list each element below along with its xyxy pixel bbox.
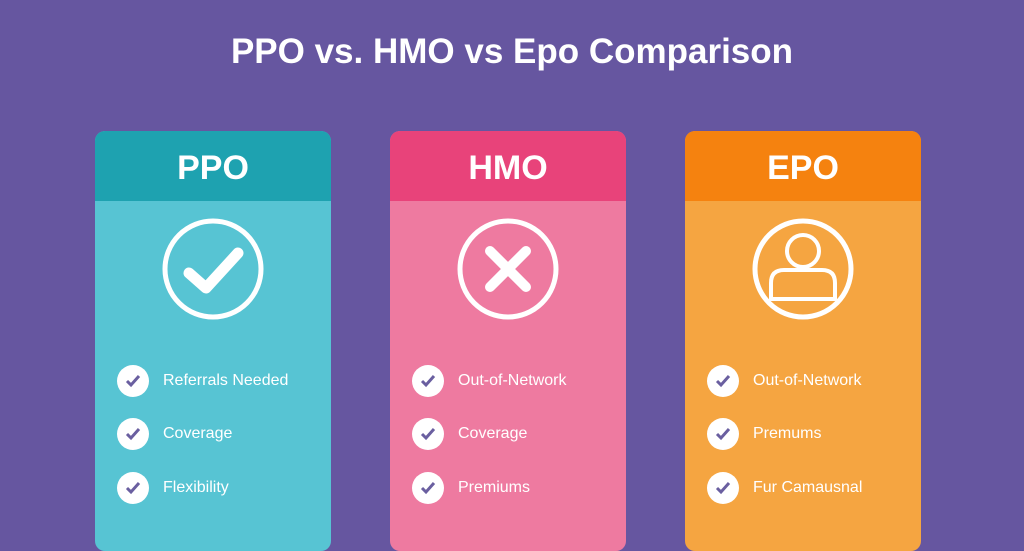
heading: PPO: PPO (177, 149, 249, 187)
icon: check circle (162, 218, 264, 320)
item (117, 365, 288, 397)
item: Premiums (458, 479, 530, 496)
item (412, 365, 566, 397)
item: Out-of-Network (753, 372, 861, 389)
icon: x circle (458, 218, 558, 320)
item: Fur Camausnal (753, 479, 862, 496)
item: Out-of-Network (458, 372, 566, 389)
item (117, 418, 232, 450)
item (117, 472, 229, 504)
item (707, 365, 862, 397)
item: Coverage (458, 425, 527, 442)
item (412, 472, 530, 504)
heading: PPO (95, 131, 331, 201)
item: Flexibility (163, 479, 229, 496)
heading: HMO (390, 131, 626, 201)
item: Premums (753, 425, 821, 442)
panel: PPO (95, 131, 331, 551)
item (412, 418, 527, 450)
item: Referrals Needed (163, 372, 288, 389)
item: Coverage (163, 425, 232, 442)
title: PPO vs. HMO vs Epo Comparison (231, 32, 793, 71)
heading: HMO: HMO (468, 149, 548, 187)
heading: EPO: EPO (767, 149, 839, 187)
icon: person circle (752, 218, 854, 320)
item (707, 418, 821, 450)
heading: EPO (685, 131, 921, 201)
panel: EPO (685, 131, 921, 551)
item (707, 472, 862, 504)
panel: HMO (390, 131, 626, 551)
